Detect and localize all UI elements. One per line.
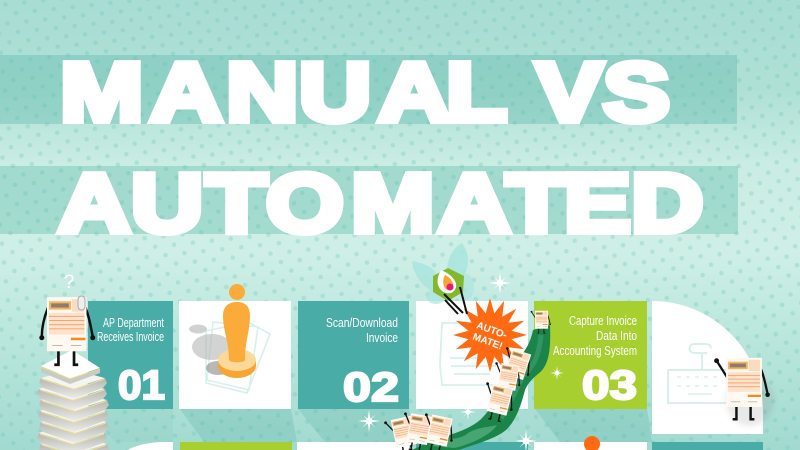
- board row two: green square: [180, 442, 292, 450]
- step 03 panel: 03: [582, 362, 637, 408]
- board row two: teal square right: [652, 442, 763, 450]
- icon: sparkle by step 03: [550, 366, 564, 380]
- title band: line one: [0, 55, 737, 124]
- title: AUTOMATED: [58, 157, 703, 250]
- board row two: teal square: [416, 442, 528, 450]
- step 01 panel: [88, 301, 173, 409]
- icon: orange stamp: [218, 284, 256, 378]
- board row two: curved white corner: [127, 442, 173, 450]
- step 02 illustration: scanner card: [416, 301, 528, 409]
- step 01 panel: 01: [118, 362, 165, 408]
- step 03 illustration: keyboard card: [652, 301, 763, 434]
- question mark: ?: [64, 272, 74, 293]
- step 03 panel: [534, 301, 647, 409]
- step 02 panel: Invoice: [366, 331, 398, 345]
- step 01 illustration: stamp card: [179, 284, 291, 409]
- step 03 panel: Accounting System: [553, 344, 637, 358]
- step 03 panel: Capture Invoice: [569, 314, 637, 328]
- step 03 panel: Data Into: [596, 329, 637, 343]
- title: [58, 46, 703, 250]
- callout: automate burst: AUTO-: [475, 320, 508, 341]
- step 01 panel: AP Department: [103, 316, 164, 330]
- title band: line two: [0, 166, 738, 234]
- callout: automate burst: [453, 298, 527, 372]
- step 02 panel: [298, 301, 409, 410]
- character: invoice on keyboard: [714, 358, 774, 426]
- icon: paper clip: [78, 296, 85, 310]
- icon: sparkles: [358, 272, 537, 450]
- automation chute: [412, 325, 550, 450]
- step 02 panel: 02: [343, 364, 399, 410]
- characters on chute: [384, 311, 551, 450]
- board row two: white square: [297, 442, 409, 450]
- icon: winged hexagon fairy: [412, 243, 474, 314]
- step 01 panel: Receives Invoice: [97, 330, 164, 344]
- callout: automate burst: MATE!: [471, 332, 504, 353]
- long shadows under squares: [88, 409, 652, 442]
- title: MANUAL VS: [60, 46, 670, 139]
- character: confused invoice on stack: [39, 296, 95, 365]
- paper stack: [37, 350, 109, 450]
- step 02 panel: Scan/Download: [326, 316, 398, 330]
- board row two: white square with orange marker: [534, 436, 647, 450]
